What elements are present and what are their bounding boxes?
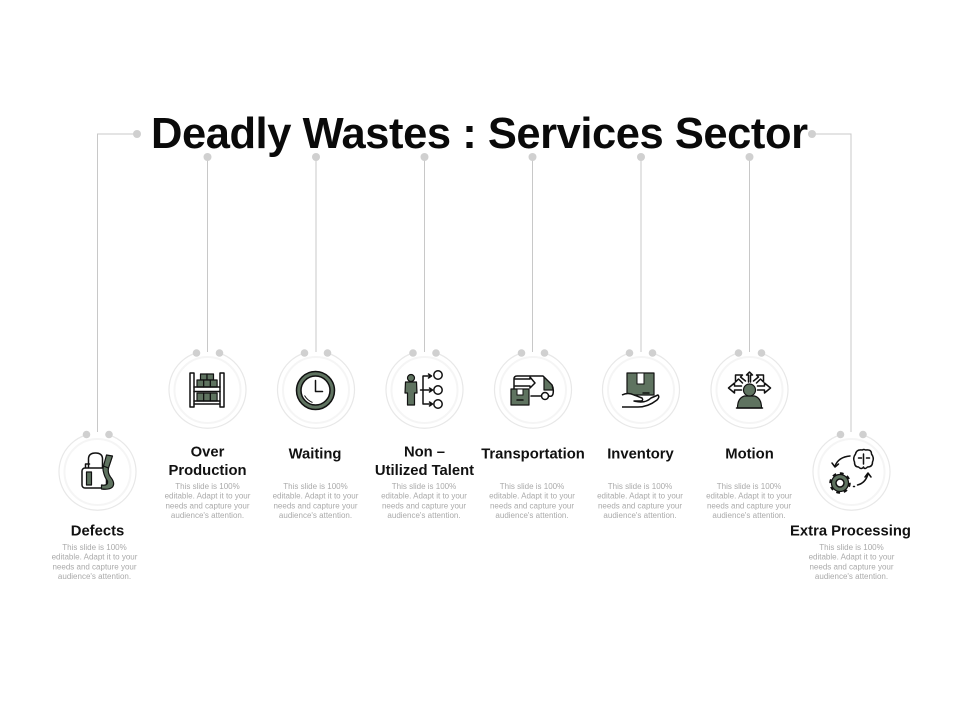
icon: delivery van with box [511,376,553,405]
icon: person with arrows [728,372,770,408]
text block: waiting: This slide is 100% [283,482,348,491]
text block: waiting: audience's attention. [279,511,352,520]
text block: transportation: needs and capture your [490,501,574,510]
icon ring: transportation [494,349,572,428]
connector: defects [98,130,141,432]
panel: inventory [597,349,683,520]
heading: waiting: Waiting [289,446,341,462]
text block: motion: needs and capture your [707,501,791,510]
text block: extra processing: audience's attention. [815,572,888,581]
icon ring: over production [169,349,246,428]
icon: stocked shelves [190,373,224,407]
icon: hand holding box [622,373,659,407]
heading: non-utilized talent: Utilized Talent [375,463,474,479]
panel: waiting [273,349,359,520]
text block: inventory: needs and capture your [598,501,682,510]
text block: defects: This slide is 100% [62,543,127,552]
text block: over production: This slide is 100% [175,482,240,491]
icon ring: extra processing [813,431,890,510]
text block: waiting: needs and capture your [273,501,358,510]
text block: motion: audience's attention. [712,511,786,520]
panel: over production [165,349,251,520]
connector: extra processing [808,130,851,432]
text block: waiting: editable. Adapt it to your [273,492,359,501]
icon ring: motion [711,349,788,428]
panel: non-utilized talent [375,349,474,520]
icon ring: defects [59,431,136,510]
text block: motion: editable. Adapt it to your [706,492,792,501]
icon: padlock with snake [82,453,114,489]
text block: defects: editable. Adapt it to your [52,553,138,562]
connector: transportation [528,153,536,352]
connector: inventory [637,153,645,352]
text block: inventory: This slide is 100% [608,482,672,491]
heading: motion: Motion [725,446,774,462]
text block: extra processing: This slide is 100% [819,543,884,552]
icon ring: inventory [602,349,680,428]
text block: transportation: This slide is 100% [500,482,564,491]
connector: non-utilized talent [420,153,428,352]
heading: over production: Production [168,463,247,479]
heading: defects: Defects [71,524,124,540]
text block: over production: needs and capture your [165,501,250,510]
panel: motion [706,349,792,520]
heading: over production: Over [191,444,225,460]
heading: transportation: Transportation [481,446,585,462]
panel: extra processing [790,431,911,581]
panel: defects [52,431,138,581]
connector: over production [204,153,212,352]
text block: extra processing: needs and capture your [809,562,894,571]
panel: transportation [481,349,585,520]
icon ring: non-utilized talent [386,349,463,428]
heading: inventory: Inventory [607,446,675,462]
heading: non-utilized talent: Non – [404,444,445,460]
icon ring: waiting [278,349,354,428]
icon: person with options [405,371,442,408]
connector: motion [746,153,754,352]
text block: non-utilized talent: audience's attention. [387,511,461,520]
text block: over production: audience's attention. [171,511,244,520]
text block: non-utilized talent: This slide is 100% [392,482,456,491]
text block: transportation: audience's attention. [495,511,569,520]
text block: defects: needs and capture your [52,562,137,571]
text block: inventory: audience's attention. [603,511,677,520]
text block: defects: audience's attention. [58,572,131,581]
text block: motion: This slide is 100% [717,482,781,491]
text block: extra processing: editable. Adapt it to your [809,553,895,562]
heading: extra processing: Extra Processing [790,524,911,540]
text block: over production: editable. Adapt it to your [165,492,251,501]
title: Deadly Wastes : Services Sector [151,110,808,158]
text block: non-utilized talent: editable. Adapt it to your [381,492,467,501]
text block: inventory: editable. Adapt it to your [597,492,683,501]
icon: clock [296,372,334,410]
icon: gear and brain cycle [831,450,873,492]
text block: non-utilized talent: needs and capture your [382,501,466,510]
connector: waiting [312,153,320,352]
text block: transportation: editable. Adapt it to your [489,492,575,501]
